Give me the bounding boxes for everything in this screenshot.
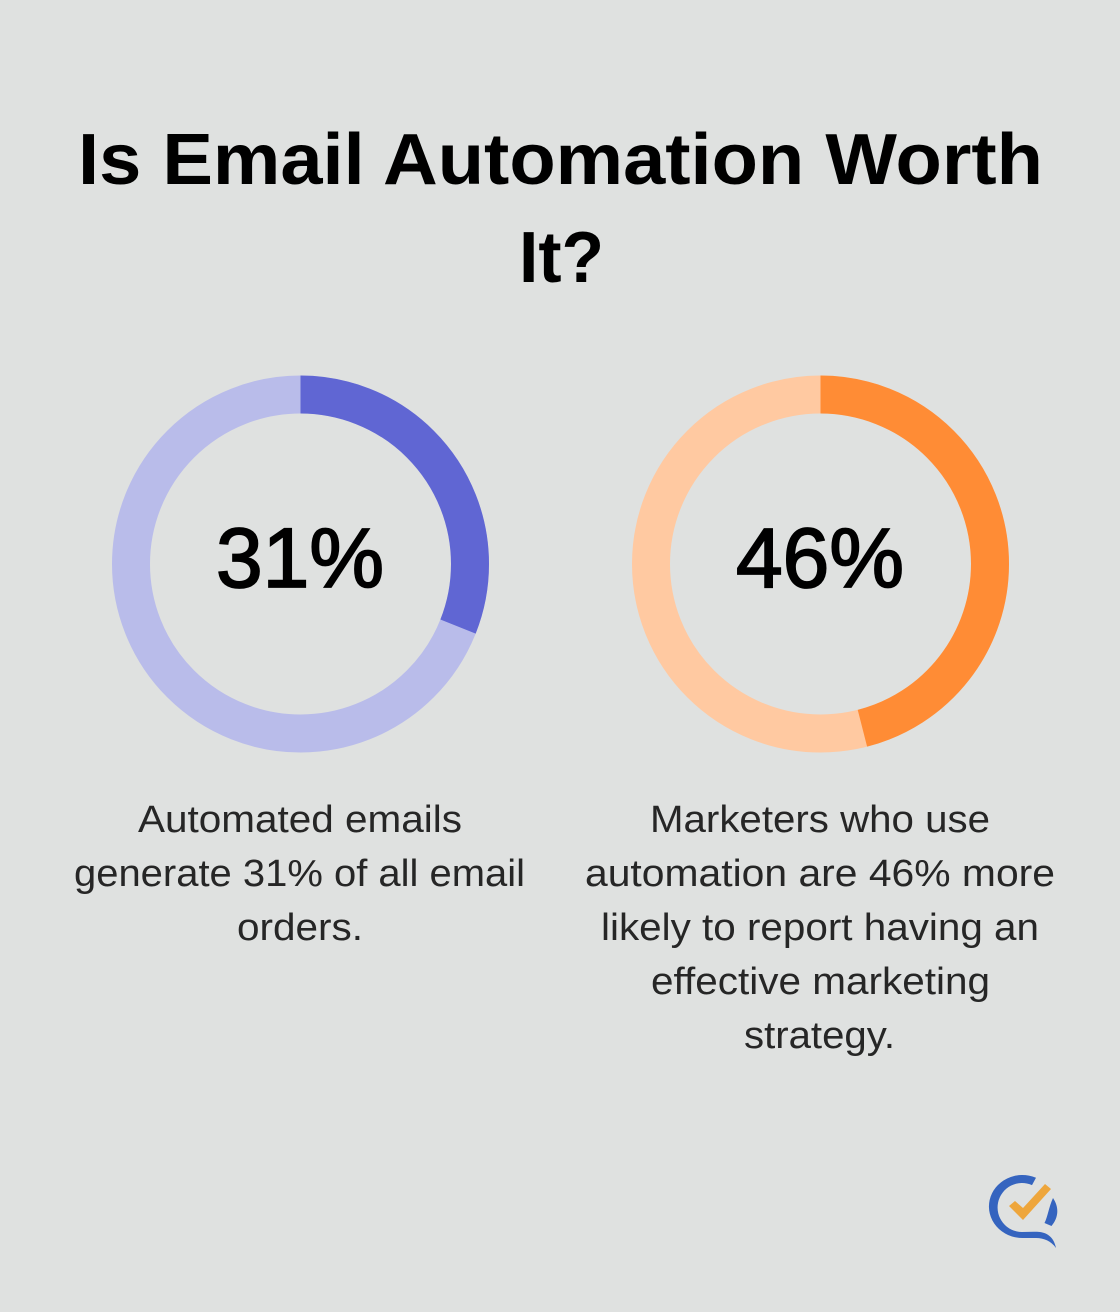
title: It? <box>519 218 604 298</box>
description: 46%: strategy. <box>744 1015 895 1057</box>
description: 46%: Marketers who use <box>650 799 990 841</box>
description: 31%: orders. <box>237 907 363 949</box>
description: 31%: generate 31% of all email <box>74 853 525 895</box>
donut chart: 46% <box>651 394 990 734</box>
description: 31%: Automated emails <box>138 799 462 841</box>
icon: logo chat bubble with check mark <box>989 1175 1057 1248</box>
description: 31% <box>74 799 525 949</box>
value: 31%: 31% <box>216 511 384 605</box>
title: Is Email Automation Worth <box>78 120 1043 200</box>
panel: 31% automated emails <box>74 394 525 949</box>
description: 46%: automation are 46% more <box>585 853 1055 895</box>
panel: 46% marketers <box>585 394 1055 1057</box>
description: 46%: likely to report having an <box>601 907 1039 949</box>
value: 46%: 46% <box>736 511 904 605</box>
description: 46%: effective marketing <box>651 961 990 1003</box>
title <box>78 120 1043 298</box>
donut chart: 31% <box>131 394 470 734</box>
description: 46% <box>585 799 1055 1057</box>
